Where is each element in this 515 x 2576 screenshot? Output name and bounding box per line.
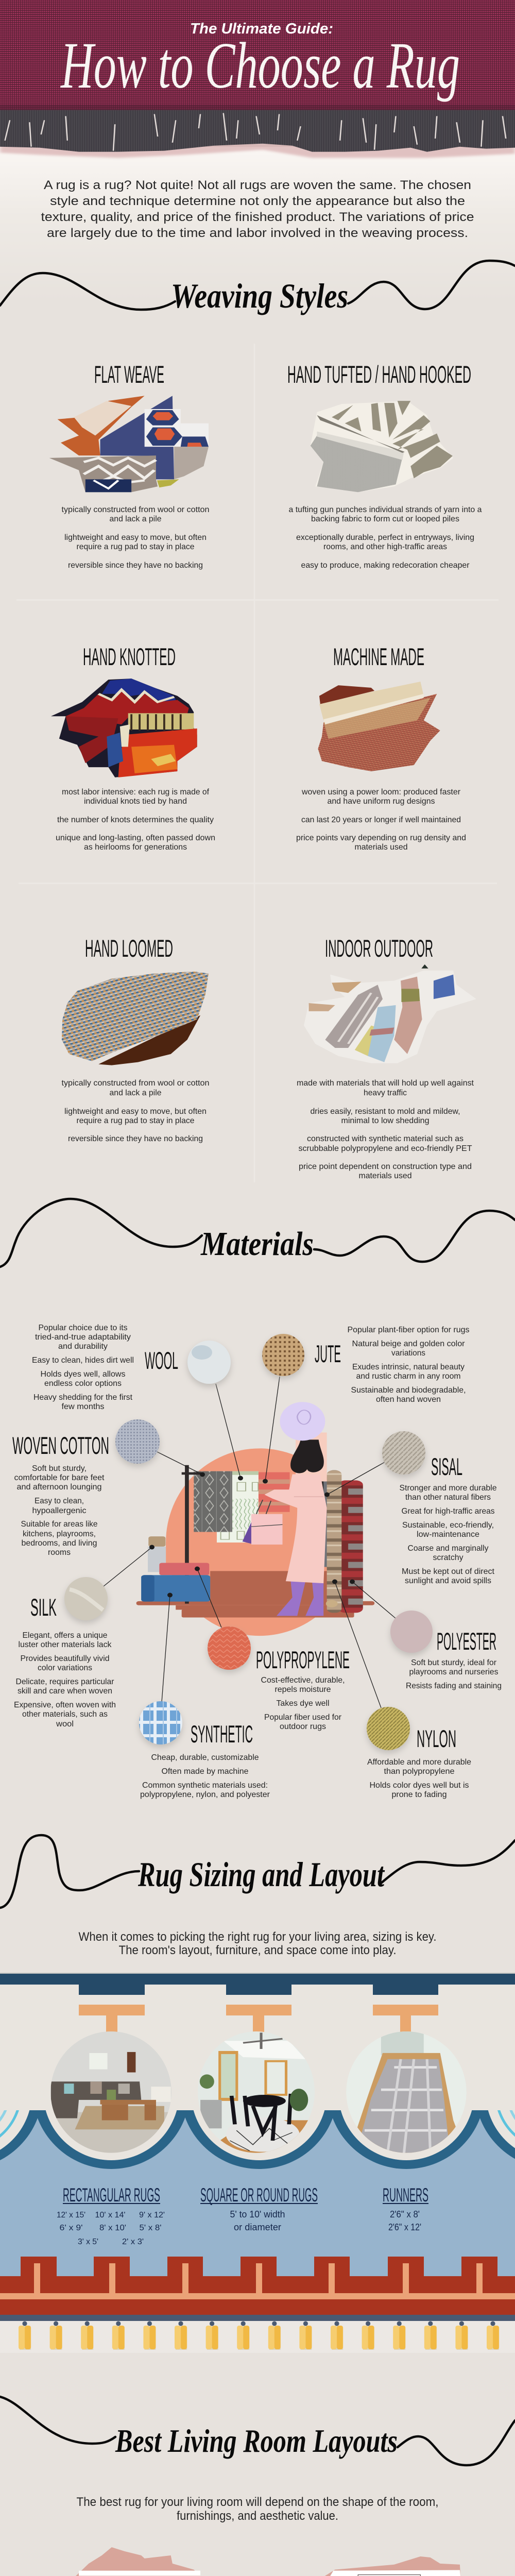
description: as heirlooms for generations: [84, 843, 187, 852]
jute swatch: [262, 1334, 304, 1379]
polypropylene text: outdoor rugs: [280, 1722, 326, 1731]
sizing intro text: The room's layout, furniture, and space come into play.: [118, 1943, 397, 1957]
silk text: Delicate, requires particular: [15, 1677, 114, 1686]
polypropylene text: Popular fiber used for: [264, 1713, 342, 1722]
sizes: rectangular rugs: 2' x 3': [122, 2238, 144, 2246]
material: wool: WOOL: [145, 1347, 178, 1374]
material: jute: [262, 1326, 470, 1404]
description: materials used: [358, 1172, 412, 1180]
material: silk: [14, 1577, 116, 1728]
jute text: Sustainable and biodegradable,: [351, 1386, 466, 1395]
material: jute: JUTE: [315, 1340, 341, 1367]
cotton text: comfortable for bare feet: [14, 1473, 105, 1482]
image: machine made rug: [318, 682, 440, 771]
jute text: often hand woven: [376, 1395, 441, 1404]
sizing intro text: When it comes to picking the right rug for your living area, sizing is key.: [78, 1930, 437, 1944]
description: typically constructed from wool or cotton: [62, 505, 209, 514]
material: sisal: [382, 1431, 497, 1585]
description: exceptionally durable, perfect in entryways, living: [296, 533, 474, 542]
floor plan diagram: [297, 2556, 478, 2576]
text: RUNNERS: [383, 2184, 428, 2206]
description: require a rug pad to stay in place: [76, 1116, 195, 1125]
heading: Materials: [0, 1199, 515, 1267]
sizes: rectangular rugs: 9' x 12': [139, 2211, 165, 2219]
wool text: tried-and-true adaptability: [35, 1333, 131, 1342]
nylon swatch: [367, 1707, 410, 1753]
wool swatch: [187, 1341, 231, 1387]
synthetic text: Often made by machine: [162, 1767, 249, 1776]
cotton text: and afternoon lounging: [16, 1483, 102, 1492]
description: scrubbable polypropylene and eco-friendly PET: [299, 1144, 472, 1153]
cotton text: [14, 1464, 105, 1557]
cotton text: kitchens, playrooms,: [23, 1530, 96, 1538]
material: polyester: [390, 1611, 502, 1690]
sisal text: than other natural fibers: [405, 1493, 491, 1502]
jute text: Natural beige and golden color: [352, 1340, 465, 1348]
silk text: Expensive, often woven with: [14, 1701, 116, 1709]
panel: rug sizes decorative rug graphic: [0, 1973, 515, 2353]
synthetic text: Cheap, durable, customizable: [151, 1753, 259, 1762]
description: reversible since they have no backing: [68, 561, 203, 570]
description: woven using a power loom: produced faster: [301, 788, 461, 796]
silk swatch: [64, 1577, 108, 1623]
sizes: runners: 2'6" x 8': [390, 2209, 420, 2219]
polyester swatch: [390, 1611, 433, 1656]
silk heading: SILK: [30, 1594, 57, 1621]
sisal text: Sustainable, eco-friendly,: [402, 1521, 494, 1530]
heading: Materials: Materials: [200, 1225, 314, 1263]
sizes: rectangular rugs: 6' x 9': [60, 2224, 82, 2232]
material: nylon: NYLON: [417, 1725, 456, 1752]
rug fringe: [0, 110, 515, 158]
image: hand knotted rug: [51, 679, 197, 777]
heading: Best Living Room Layouts: [0, 2397, 515, 2465]
sizes: rectangular rugs: 8' x 10': [99, 2224, 126, 2232]
photo: stair runner: [345, 2030, 468, 2155]
nylon text: Holds color dyes well but is: [370, 1781, 469, 1790]
description: individual knots tied by hand: [84, 797, 187, 806]
sizes: square or round rugs: 5' to 10' width: [230, 2209, 285, 2219]
polyester text: playrooms and nurseries: [409, 1668, 499, 1676]
material: woven cotton: WOVEN COTTON: [12, 1432, 109, 1459]
description: and lack a pile: [109, 515, 162, 523]
silk text: Provides beautifully vivid: [21, 1654, 109, 1663]
woman figure: [243, 1402, 338, 1616]
text: POLYPROPYLENE: [256, 1646, 350, 1673]
material: nylon: [367, 1707, 471, 1799]
image: tufted rug corner: [311, 401, 453, 492]
material: woven cotton: [12, 1419, 160, 1557]
polypropylene text: [261, 1676, 345, 1731]
description: minimal to low shedding: [341, 1116, 430, 1125]
panel: hand tufted: [287, 361, 482, 570]
photo: living room: [49, 2030, 174, 2155]
sisal text: low-maintenance: [417, 1530, 479, 1539]
wool text: few months: [62, 1402, 104, 1411]
description: constructed with synthetic material such as: [307, 1134, 464, 1143]
sisal swatch: [382, 1431, 425, 1478]
wool text: Easy to clean, hides dirt well: [32, 1356, 134, 1365]
wool text: Popular choice due to its: [38, 1324, 128, 1332]
intro text: A rug is a rug? Not quite! Not all rugs are woven the same. The chosen: [44, 178, 471, 192]
sisal text: [400, 1484, 497, 1585]
jute text: Exudes intrinsic, natural beauty: [352, 1363, 465, 1371]
description: require a rug pad to stay in place: [76, 543, 195, 551]
wool text: Holds dyes well, allows: [40, 1370, 126, 1379]
material: synthetic: SYNTHETIC: [191, 1720, 253, 1748]
description: [56, 788, 215, 852]
polypropylene text: Takes dye well: [276, 1699, 330, 1708]
description: backing fabric to form cut or looped piles: [311, 515, 459, 523]
connector lines with dots: [104, 1377, 396, 1708]
description: lightweight and easy to move, but often: [64, 533, 207, 542]
description: a tufting gun punches individual strands of yarn into a: [288, 505, 482, 514]
material: polypropylene: [208, 1626, 350, 1731]
polypropylene text: repels moisture: [275, 1685, 331, 1694]
intro text: style and technique determine not only the appearance but also the: [50, 194, 465, 208]
description: most labor intensive: each rug is made of: [62, 788, 210, 796]
description: [297, 1079, 474, 1180]
description: the number of knots determines the quality: [57, 816, 214, 824]
intro text: are largely due to the time and labor involved in the weaving process.: [47, 226, 468, 240]
living room intro text: furnishings, and aesthetic value.: [177, 2509, 338, 2523]
description: materials used: [354, 843, 408, 852]
illustration: woman shopping for rugs: [136, 1402, 374, 1636]
wool text: Heavy shedding for the first: [33, 1393, 133, 1402]
sizes: rectangular rugs: 3' x 5': [78, 2238, 98, 2246]
description: [296, 788, 466, 852]
silk text: wool: [56, 1720, 74, 1728]
silk text: Elegant, offers a unique: [23, 1631, 108, 1640]
silk text: [14, 1631, 116, 1728]
jute text: and rustic charm in any room: [356, 1372, 460, 1381]
sizes: square or round rugs: or diameter: [234, 2222, 281, 2232]
sizes: runners: 2'6" x 12': [388, 2222, 421, 2232]
synthetic text: polypropylene, nylon, and polyester: [140, 1790, 270, 1799]
description: reversible since they have no backing: [68, 1134, 203, 1143]
intro text: [41, 178, 474, 240]
panel: flat weave: FLAT WEAVE: [94, 361, 164, 388]
sizing intro text: [78, 1930, 437, 1957]
clothes rack: [182, 1465, 201, 1604]
sizes: rectangular rugs: RECTANGULAR RUGS: [63, 2184, 160, 2206]
cotton text: rooms: [48, 1548, 71, 1557]
description: easy to produce, making redecoration cheaper: [301, 561, 470, 570]
nylon text: Affordable and more durable: [367, 1758, 471, 1767]
jute text: [347, 1326, 470, 1404]
wool text: [32, 1324, 134, 1411]
panel: hand loomed: HAND LOOMED: [85, 935, 173, 962]
description: made with materials that will hold up well against: [297, 1079, 474, 1088]
text: SQUARE OR ROUND RUGS: [200, 2184, 318, 2206]
heading: Weaving Styles: Weaving Styles: [171, 276, 348, 315]
description: and have uniform rug designs: [328, 797, 435, 806]
description: can last 20 years or longer if well maintained: [301, 816, 461, 824]
silk text: skill and care when woven: [18, 1687, 112, 1696]
heading: Best Living Room Layouts: Best Living Room Layouts: [115, 2422, 398, 2459]
description: heavy traffic: [364, 1089, 407, 1097]
intro text: texture, quality, and price of the finished product. The variations of price: [41, 210, 474, 224]
sizes: rectangular rugs: [57, 2184, 165, 2246]
image: hand loomed rug: [62, 972, 209, 1065]
panel: hand knotted: [51, 643, 215, 852]
description: [62, 505, 209, 570]
nylon text: [367, 1758, 471, 1799]
silk text: luster other materials lack: [19, 1640, 112, 1649]
living room intro text: The best rug for your living room will depend on the shape of the room,: [76, 2495, 439, 2509]
description: unique and long-lasting, often passed down: [56, 834, 215, 842]
polypropylene text: Cost-effective, durable,: [261, 1676, 345, 1685]
cotton text: bedrooms, and living: [22, 1539, 97, 1548]
sisal text: sunlight and avoid spills: [405, 1577, 491, 1585]
panel: indoor outdoor: [297, 935, 476, 1180]
synthetic text: [140, 1753, 270, 1799]
synthetic swatch: [139, 1701, 182, 1748]
jute text: Popular plant-fiber option for rugs: [347, 1326, 470, 1334]
polypropylene swatch: [208, 1626, 251, 1673]
jute text: variations: [391, 1349, 425, 1358]
panel: machine made: [296, 643, 466, 852]
rolled rugs left: [141, 1536, 210, 1602]
description: typically constructed from wool or cotton: [62, 1079, 209, 1088]
nylon text: prone to fading: [391, 1790, 447, 1799]
wool text: and durability: [58, 1342, 108, 1351]
sizes: rectangular rugs: 5' x 8': [139, 2224, 162, 2232]
description: lightweight and easy to move, but often: [64, 1107, 207, 1116]
description: price points vary depending on rug density and: [296, 834, 466, 842]
cotton text: Suitable for areas like: [21, 1520, 98, 1529]
hanging rugs: [194, 1471, 290, 1543]
living layout 2: rug under coffee table: [297, 2556, 478, 2576]
material: wool: [32, 1324, 231, 1411]
cotton text: Easy to clean,: [35, 1497, 84, 1505]
silk text: color variations: [38, 1664, 92, 1672]
panel: hand loomed: [62, 935, 209, 1143]
polyester text: Soft but sturdy, ideal for: [411, 1658, 497, 1667]
heading: Rug Sizing and Layout: Rug Sizing and Layout: [138, 1855, 385, 1894]
sisal text: Coarse and marginally: [408, 1544, 488, 1553]
image: rolled indoor outdoor rugs: [304, 964, 476, 1063]
image: flat weave rug fragments: [49, 396, 209, 492]
sisal text: Stronger and more durable: [400, 1484, 497, 1493]
description: and lack a pile: [109, 1089, 162, 1097]
cotton swatch: [115, 1419, 160, 1467]
sizes: rectangular rugs: 12' x 15': [57, 2211, 85, 2219]
description: [62, 1079, 209, 1143]
description: rooms, and other high-traffic areas: [323, 543, 447, 551]
sisal text: Great for high-traffic areas: [402, 1507, 494, 1516]
panel: flat weave: [49, 361, 209, 570]
heading: Weaving Styles: [0, 261, 515, 315]
wool text: endless color options: [44, 1379, 122, 1388]
title kicker: The Ultimate Guide:: [190, 21, 333, 37]
silk text: other materials, such as: [22, 1710, 108, 1719]
heading: Rug Sizing and Layout: [0, 1835, 515, 1908]
cotton text: Soft but sturdy,: [32, 1464, 87, 1473]
material: sisal: SISAL: [431, 1453, 462, 1480]
sizes: rectangular rugs: 10' x 14': [95, 2211, 126, 2219]
sizes: square or round rugs: [200, 2184, 318, 2232]
sizes: runners: [383, 2184, 428, 2232]
cotton text: hypoallergenic: [32, 1506, 87, 1515]
description: dries easily, resistant to mold and mildew,: [310, 1107, 460, 1116]
description: price point dependent on construction type and: [299, 1162, 472, 1171]
photo: dining room: [200, 2031, 308, 2153]
polyester text: Resists fading and staining: [406, 1682, 502, 1690]
living layout 1: one large rug: [26, 2547, 218, 2576]
sisal text: Must be kept out of direct: [402, 1567, 495, 1576]
material: synthetic: [139, 1701, 270, 1799]
panel: hand knotted: HAND KNOTTED: [83, 643, 176, 670]
description: [288, 505, 482, 570]
nylon text: than polypropylene: [384, 1767, 455, 1776]
floor plan diagram: [26, 2547, 218, 2576]
polyester text: [406, 1658, 502, 1690]
synthetic text: Common synthetic materials used:: [142, 1781, 268, 1790]
sisal text: scratchy: [433, 1553, 464, 1562]
header: woven rug banner: [0, 0, 515, 158]
rolled rugs right: [318, 1470, 363, 1613]
living room intro text: [76, 2495, 439, 2523]
